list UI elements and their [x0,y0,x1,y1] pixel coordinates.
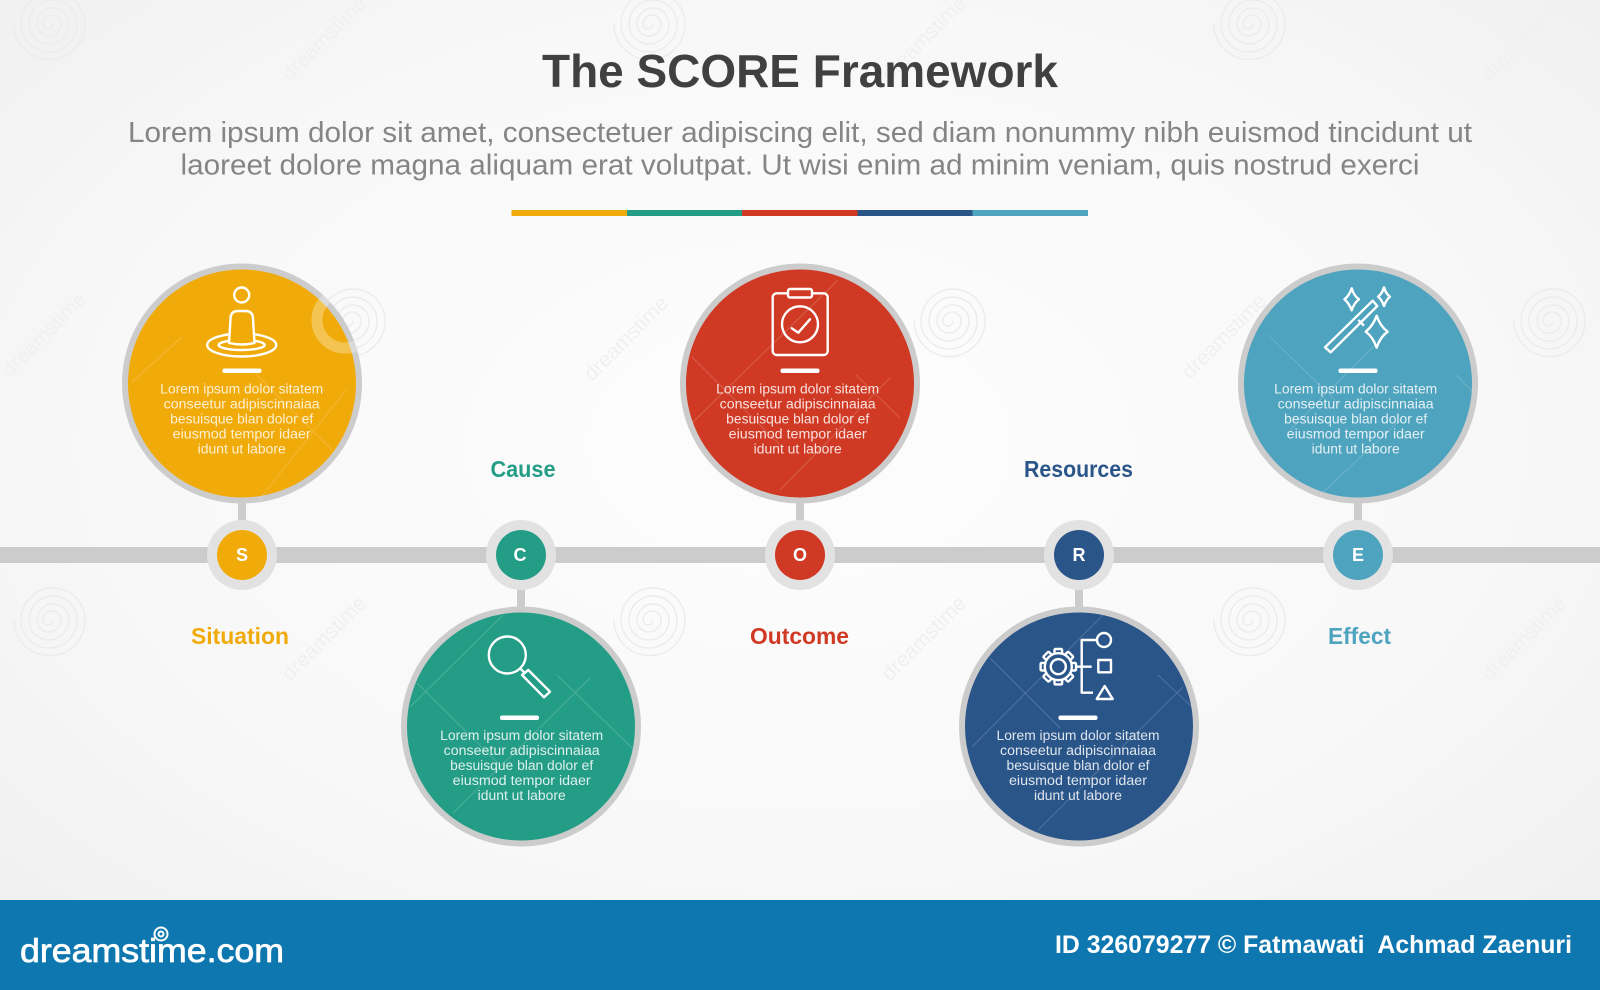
subtitle: laoreet dolore magna aliquam erat volutpat. Ut wisi enim ad minim veniam, quis nostrud exerci [180,150,1420,182]
node: S: S [236,545,248,565]
watermark text: dreamstime [579,292,673,386]
body text: conseetur adipiscinnaiaa [1278,396,1434,412]
body text: idunt ut labore [1034,788,1122,803]
icon: gear and shapes [1041,633,1113,699]
panel: outcome [683,266,917,500]
body text: besuisque blan dolor ef [726,412,869,426]
body text: eiusmod tempor idaer [453,773,591,788]
footer logo: dreamstime.com [20,932,284,969]
logo spiral [154,928,168,940]
watermark lines on circle [1268,335,1475,495]
spiral watermark overlay [312,295,358,354]
body text: Lorem ipsum dolor sitatem [160,382,323,396]
body text: besuisque blan dolor ef [1284,412,1427,426]
body text: idunt ut labore [1312,442,1400,456]
panel: effect [1241,266,1475,500]
connectors [238,500,1362,610]
watermark text: dreamstime [1477,592,1571,686]
body text: eiusmod tempor idaer [1287,426,1425,442]
label: resources: Resources [1024,456,1133,482]
watermark lines on circle [972,615,1192,830]
node: R: R [1072,545,1086,565]
node: E [1323,520,1393,590]
body text: Lorem ipsum dolor sitatem [440,728,603,743]
body text: conseetur adipiscinnaiaa [164,396,320,412]
watermark lines on circle [690,280,900,490]
dash [1338,368,1378,373]
body text: besuisque blan dolor ef [1006,758,1150,773]
watermark lines on circle [410,615,632,813]
node: C [486,520,556,590]
label: situation: Situation [191,623,289,649]
watermark text: dreamstime [277,592,371,686]
node: O: O [793,545,807,565]
body text: Lorem ipsum dolor sitatem [716,382,879,396]
panel: resources [962,610,1196,844]
panel: cause [404,610,638,844]
dash [780,368,820,373]
icon: clipboard check [773,289,828,355]
panel: situation [125,266,373,500]
body text: conseetur adipiscinnaiaa [444,743,600,758]
node: R [1044,520,1114,590]
body text: besuisque blan dolor ef [450,758,593,773]
watermark spirals [14,0,1585,656]
body text: eiusmod tempor idaer [729,426,867,442]
body text: Lorem ipsum dolor sitatem [996,728,1160,743]
dash [1058,716,1098,720]
subtitle [128,117,1472,182]
icon: magic wand [1325,287,1390,352]
body text: idunt ut labore [754,442,842,456]
body text: conseetur adipiscinnaiaa [1000,743,1157,758]
watermark text: dreamstime [877,592,971,686]
node: C: C [514,545,526,565]
body text [716,382,879,456]
colour divider bar [512,210,1088,216]
timeline [0,547,1600,563]
dash [500,716,539,720]
subtitle: Lorem ipsum dolor sit amet, consectetuer adipiscing elit, sed diam nonummy nibh euismod tincidunt ut [128,117,1472,149]
icon: magnifier [489,636,550,697]
watermark text: dreamstime [0,288,91,382]
body text: idunt ut labore [198,442,286,456]
node: S [207,520,277,590]
body text [1274,382,1437,456]
body text [996,728,1160,803]
node: O [765,520,835,590]
body text [440,728,603,803]
watermark lines on circle [132,337,346,500]
body text: besuisque blan dolor ef [170,412,313,426]
body text [160,382,323,456]
body text: eiusmod tempor idaer [1009,773,1148,788]
label: effect: Effect [1328,623,1391,649]
watermark text [0,0,1571,686]
icon: person on target [207,288,276,356]
node: E: E [1352,545,1364,565]
label: outcome: Outcome [750,623,849,649]
watermark text: dreamstime [1177,290,1271,384]
dash [222,368,262,373]
label: cause: Cause [490,456,556,482]
body text: eiusmod tempor idaer [173,426,311,442]
title: The SCORE Framework [542,45,1058,97]
footer bar [0,900,1600,990]
body text: Lorem ipsum dolor sitatem [1274,382,1437,396]
footer credit: ID 326079277 © Fatmawati Achmad Zaenuri [1055,931,1572,959]
body text: idunt ut labore [478,788,566,803]
body text: conseetur adipiscinnaiaa [720,396,876,412]
